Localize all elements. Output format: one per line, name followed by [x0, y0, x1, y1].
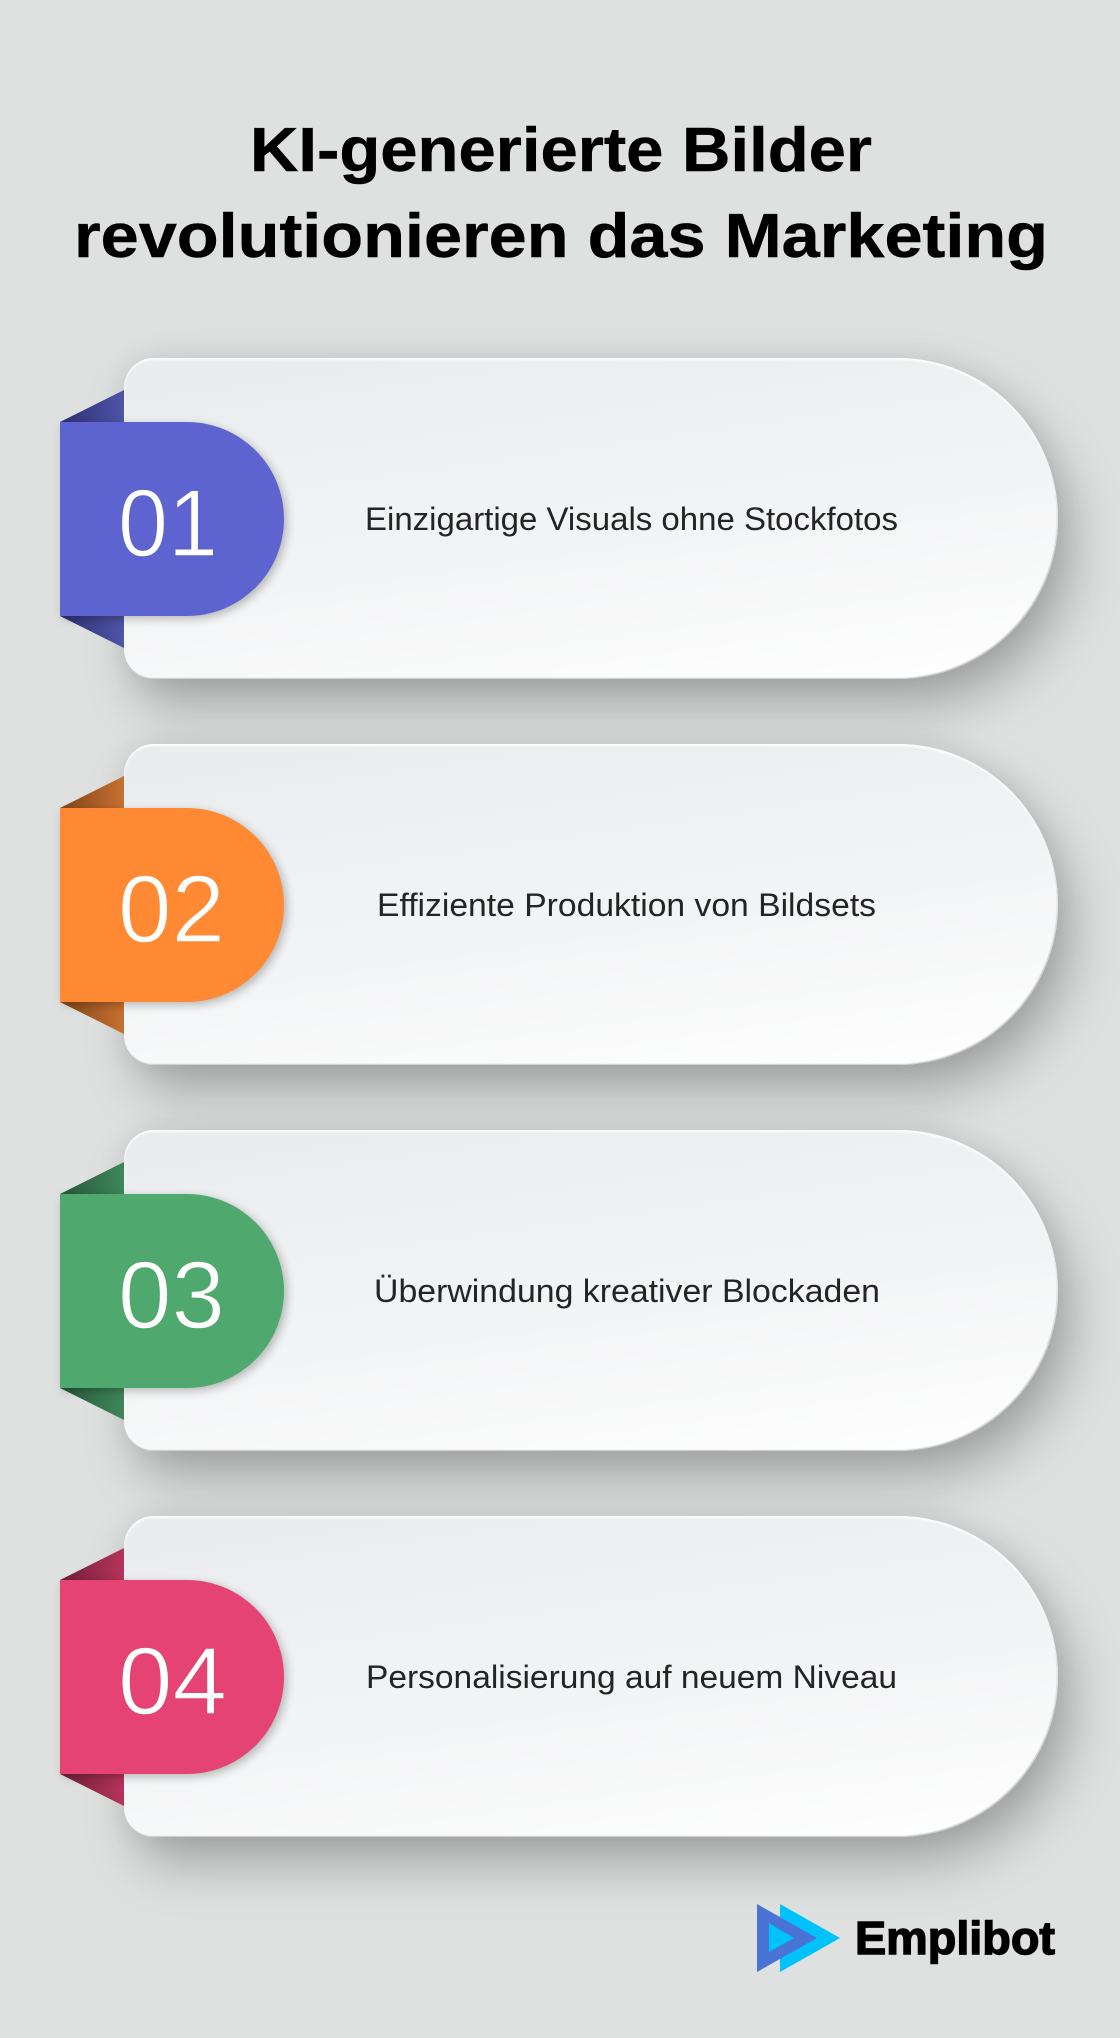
- fold corners 01: [60, 390, 124, 648]
- number 01: 01: [118, 470, 218, 577]
- title: revolutionieren das Marketing: [74, 202, 1048, 271]
- panel: item 04: [58, 1505, 1097, 1890]
- card background 01: [124, 358, 1058, 679]
- panel: item 02: [58, 733, 1097, 1118]
- panel: item 01: [58, 347, 1097, 732]
- card background 03: [124, 1130, 1058, 1451]
- panel: item 03: [58, 1119, 1097, 1504]
- card background 04: [124, 1516, 1058, 1837]
- fold corners 04: [60, 1548, 124, 1806]
- number 02: 02: [118, 856, 225, 963]
- text 03: Überwindung kreativer Blockaden: [374, 1273, 880, 1309]
- text 04: Personalisierung auf neuem Niveau: [366, 1659, 897, 1695]
- number badge 02: [60, 808, 284, 1002]
- fold corners 03: [60, 1162, 124, 1420]
- number 03: 03: [118, 1242, 225, 1349]
- title: KI-generierte Bilder: [250, 116, 872, 185]
- fold corners 02: [60, 776, 124, 1034]
- text 01: Einzigartige Visuals ohne Stockfotos: [365, 501, 898, 537]
- text 02: Effiziente Produktion von Bildsets: [377, 887, 876, 923]
- number badge 03: [60, 1194, 284, 1388]
- number 04: 04: [118, 1628, 227, 1735]
- logo: Emplibot: [757, 1904, 1056, 1972]
- number badge 01: [60, 422, 284, 616]
- title: [74, 116, 1048, 271]
- number badge 04: [60, 1580, 284, 1774]
- logo: Emplibot: Emplibot: [855, 1912, 1055, 1964]
- card background 02: [124, 744, 1058, 1065]
